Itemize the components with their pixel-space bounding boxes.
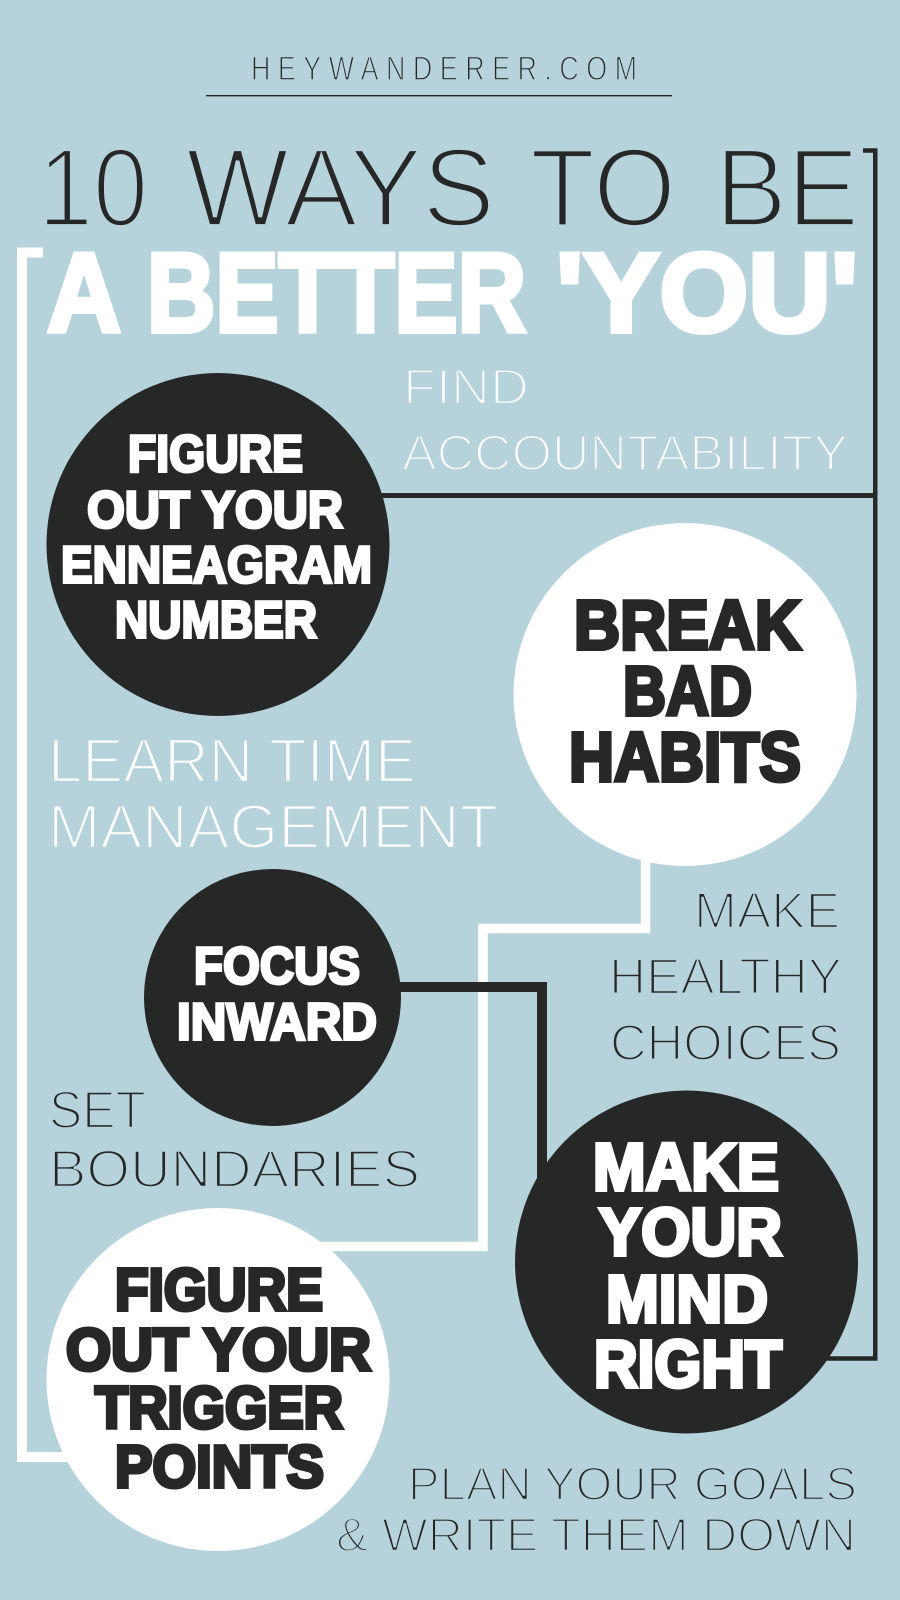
arrow: white bracket connector on left [22, 252, 70, 1457]
label: learn time management: LEARN TIME [48, 727, 416, 796]
circle: make your mind right: RIGHT [594, 1327, 782, 1402]
label: set boundaries: BOUNDARIES [49, 1140, 420, 1199]
label: set boundaries [49, 1081, 420, 1199]
circle: figure out your trigger points: OUT YOUR [66, 1317, 371, 1383]
circle: make your mind right [515, 1090, 858, 1434]
circle: figure out your enneagram number: NUMBER [115, 592, 317, 650]
arrow: white connector from break bad habits to trigger points [300, 850, 646, 1246]
circle: focus inward [144, 869, 401, 1126]
title line one: 10 [38, 126, 148, 250]
arrow: dark bracket connector on right [800, 150, 875, 1358]
label: plan your goals and write them down [336, 1457, 857, 1561]
label: find accountability: ACCOUNTABILITY [402, 424, 848, 481]
label: learn time management [48, 727, 498, 862]
circle: figure out your trigger points: FIGURE [115, 1257, 323, 1323]
circle: figure out your enneagram number [46, 373, 390, 716]
circle: focus inward: FOCUS [194, 938, 360, 996]
label: plan your goals and write them down: & WRITE THEM DOWN [336, 1508, 856, 1561]
label: find accountability: FIND [403, 358, 529, 415]
title line two: 'YOU' [556, 230, 858, 356]
site name: HEYWANDERER.COM [251, 49, 637, 88]
arrow: dark connector from enneagram circle [370, 493, 877, 498]
circle: figure out your trigger points: TRIGGER [95, 1375, 343, 1441]
circle: figure out your trigger points [46, 1208, 390, 1551]
arrow: dark connector from focus inward to make your mind right [395, 987, 542, 1190]
circle: figure out your trigger points: POINTS [115, 1434, 324, 1500]
circle: break bad habits: BAD [623, 652, 752, 730]
label: set boundaries: SET [49, 1081, 146, 1140]
label: find accountability [402, 358, 848, 481]
circle: figure out your enneagram number: FIGURE [128, 426, 303, 484]
circle: focus inward: INWARD [177, 994, 377, 1052]
label: make healthy choices: CHOICES [610, 1014, 841, 1071]
label: make healthy choices: HEALTHY [609, 948, 842, 1005]
circle: break bad habits: HABITS [569, 718, 801, 796]
circle: make your mind right: MIND [606, 1262, 768, 1337]
circle: figure out your enneagram number: OUT YOUR [87, 482, 343, 540]
title line two [47, 230, 858, 356]
title line one: BE [715, 126, 859, 250]
circle: figure out your enneagram number: ENNEAGRAM [61, 536, 372, 594]
label: make healthy choices: MAKE [694, 882, 840, 939]
circle: make your mind right: MAKE [593, 1130, 779, 1205]
label: make healthy choices [609, 882, 842, 1071]
label: learn time management: MANAGEMENT [48, 793, 498, 862]
title line one: TO [530, 126, 676, 250]
circle: break bad habits: BREAK [574, 586, 801, 664]
title line one: WAYS [186, 126, 495, 250]
title line two: A [47, 230, 121, 356]
title line two: BETTER [147, 230, 526, 356]
label: plan your goals and write them down: PLAN YOUR GOALS [408, 1457, 857, 1510]
title line one [38, 126, 859, 250]
circle: make your mind right: YOUR [599, 1195, 782, 1270]
circle: break bad habits [514, 523, 856, 866]
